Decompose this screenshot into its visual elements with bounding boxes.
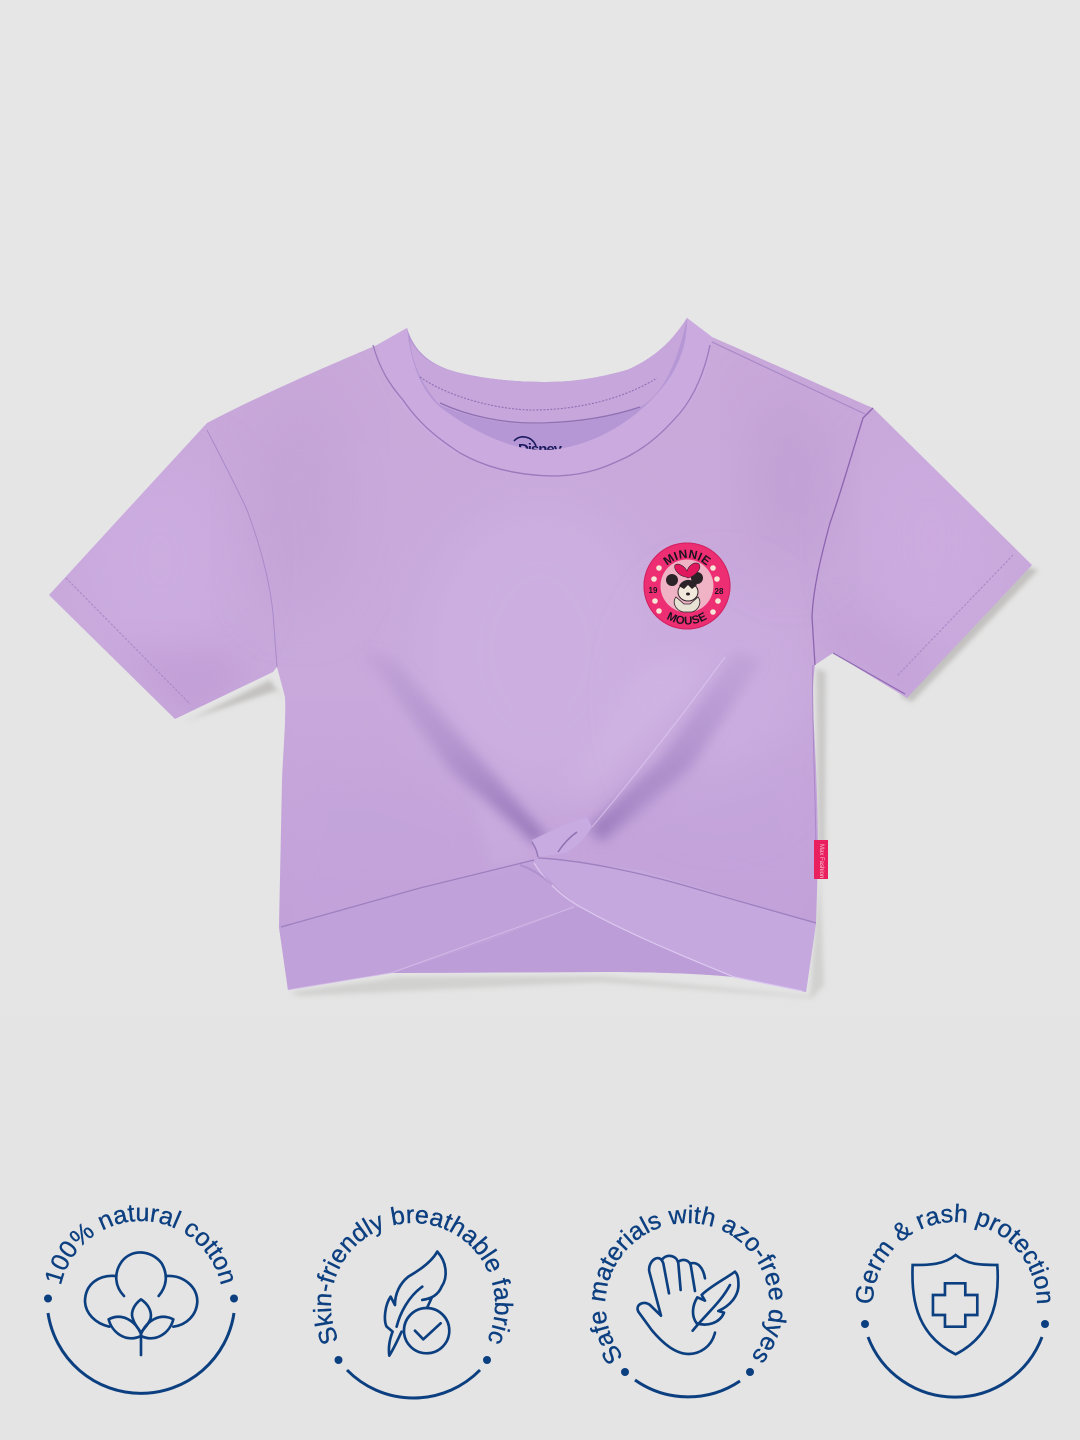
curved label: 100% natural cotton	[46, 1205, 233, 1284]
infographic canvas	[44, 318, 1050, 1400]
curved label: Safe materials with azo-free dyes	[590, 1204, 787, 1364]
dots	[861, 1320, 1049, 1328]
centre drape light	[560, 660, 710, 800]
patch dots	[651, 565, 721, 615]
patch lettering: MINNIE	[663, 550, 711, 566]
lower arc	[48, 1313, 234, 1393]
lower arc	[347, 1370, 480, 1398]
left hem flap	[279, 860, 577, 990]
twist folds	[281, 858, 816, 927]
patch centre	[660, 560, 714, 612]
badge: safe materials with azo-free dyes	[590, 1204, 787, 1398]
product photo: lilac twist-front T-shirt	[49, 318, 1038, 998]
side tag	[814, 840, 828, 879]
neck label print: Disney	[518, 441, 563, 458]
shirt silhouette	[49, 318, 1032, 992]
right hem flap	[534, 858, 816, 992]
badge: skin-friendly breathable fabric	[312, 1206, 514, 1400]
left drape shadow	[382, 664, 548, 846]
shoulder seams and sleeve hems	[66, 342, 1013, 860]
collar seam	[373, 345, 710, 476]
collar back band	[410, 318, 687, 424]
twist knot and hem panels	[279, 657, 816, 992]
patch disc	[644, 542, 730, 630]
lower arc	[635, 1380, 740, 1397]
collar stitching back	[420, 377, 657, 423]
shirt cast shadow	[185, 566, 1038, 998]
lower arc	[868, 1337, 1042, 1397]
collar front rib	[377, 318, 712, 477]
icon: hand and feather	[638, 1256, 738, 1354]
icon: cotton boll	[85, 1252, 197, 1355]
Minnie figure	[666, 563, 703, 612]
under panel	[391, 907, 734, 977]
Minnie Mouse patch	[644, 542, 730, 630]
shirt shading and folds	[80, 390, 1000, 925]
Minnie Mouse patch: MOUSE	[666, 612, 707, 625]
dots	[621, 1368, 754, 1376]
side panels	[281, 740, 530, 925]
curved label: Germ & rash protection	[856, 1204, 1050, 1304]
right drape shadow	[588, 650, 762, 842]
icon: shield with cross	[912, 1255, 998, 1354]
knot	[532, 817, 592, 857]
Minnie Mouse patch: 28	[715, 587, 724, 596]
left flap light wedge	[470, 790, 536, 868]
dots	[334, 1356, 491, 1364]
dots	[44, 1294, 238, 1302]
icon: feather with check	[385, 1252, 449, 1356]
badge: 100% natural cotton	[44, 1205, 238, 1395]
badge: germ and rash protection	[856, 1204, 1050, 1399]
collar inside back	[407, 318, 687, 450]
Minnie Mouse patch: 19	[649, 586, 658, 595]
side tag: Max Fashion	[818, 844, 824, 878]
curved label: Skin-friendly breathable fabric	[312, 1206, 514, 1344]
